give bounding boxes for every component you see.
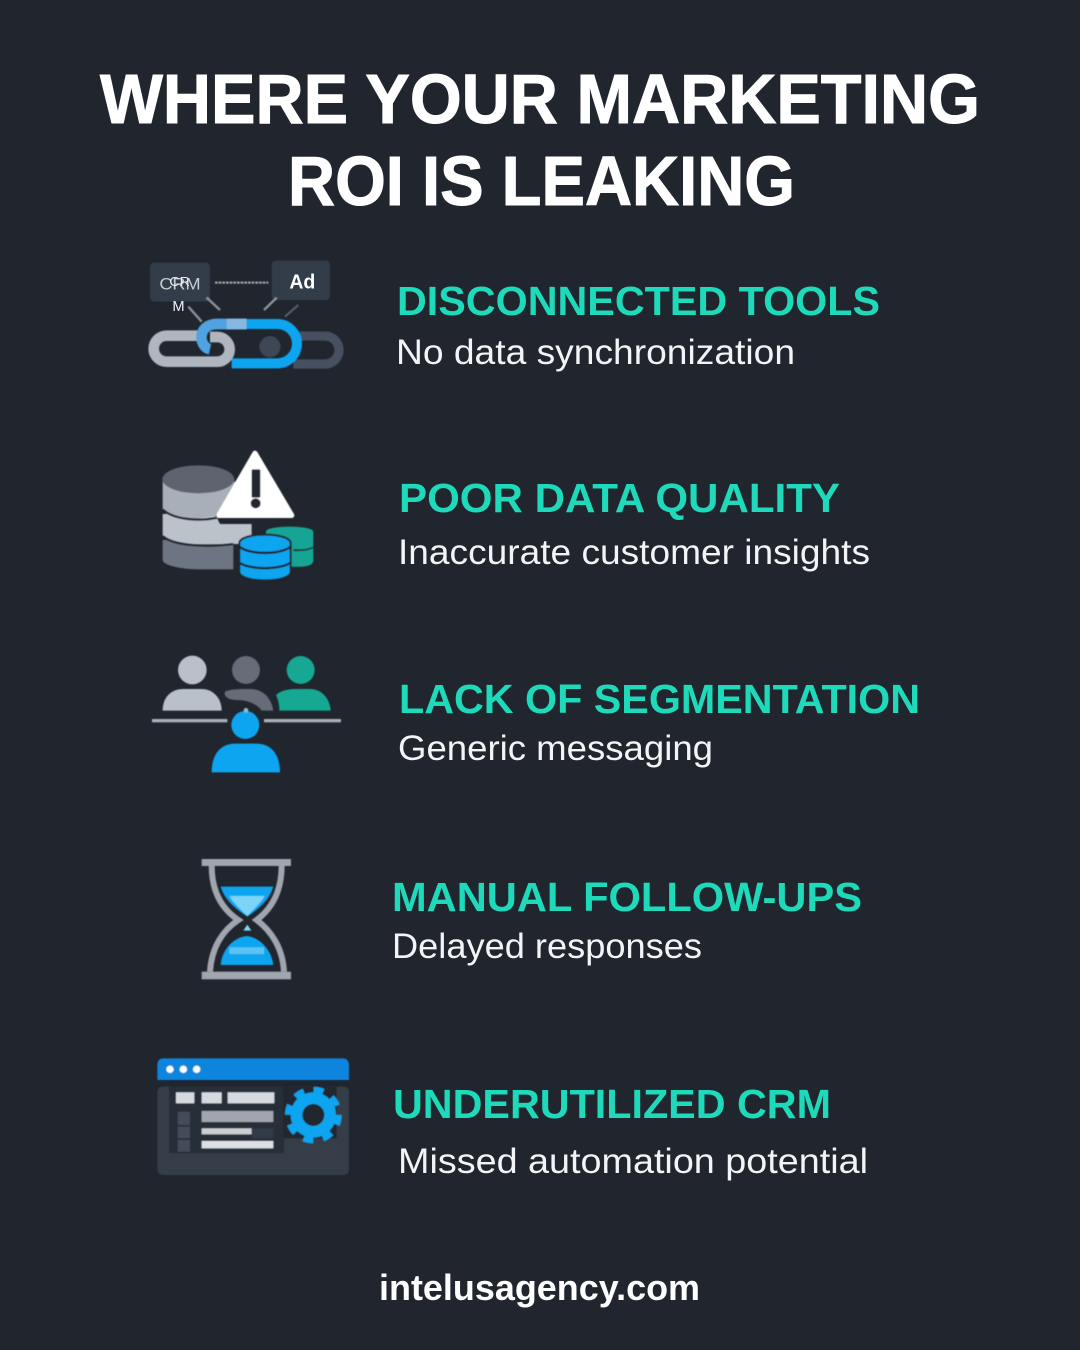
icon: audience people segments — [152, 656, 341, 772]
heading and text: disconnected tools: DISCONNECTED TOOLS — [397, 278, 880, 324]
icon: hourglass — [202, 859, 291, 979]
heading and text: manual follow-ups: MANUAL FOLLOW-UPS — [392, 874, 862, 920]
title — [100, 60, 980, 220]
footer website: intelusagency.com — [379, 1267, 700, 1308]
heading and text: underutilized crm: Missed automation potential — [398, 1142, 868, 1181]
heading and text: manual follow-ups: Delayed responses — [392, 927, 702, 966]
heading and text: manual follow-ups — [392, 874, 862, 966]
heading and text: disconnected tools: No data synchronization — [396, 333, 795, 372]
heading and text: lack of segmentation: Generic messaging — [398, 729, 713, 768]
title: ROI IS LEAKING — [288, 142, 795, 220]
heading and text: poor data quality — [398, 475, 870, 572]
heading and text: underutilized crm — [393, 1081, 868, 1181]
icon: CRM window with gear — [157, 1058, 349, 1175]
heading and text: disconnected tools — [396, 278, 880, 372]
icon: disconnected chain links with CRM and Ad boxes: CR — [169, 274, 190, 289]
heading and text: poor data quality: Inaccurate customer insights — [398, 533, 870, 572]
icon: disconnected chain links with CRM and Ad boxes: Ad — [289, 271, 315, 293]
icon: database with warning triangle — [162, 453, 313, 580]
icon: disconnected chain links with CRM and Ad boxes: M — [172, 299, 185, 315]
icon: disconnected chain links with CRM and Ad boxes — [150, 261, 339, 364]
icon: disconnected chain links with CRM and Ad boxes: CRM — [159, 274, 201, 293]
heading and text: poor data quality: POOR DATA QUALITY — [399, 475, 840, 521]
heading and text: underutilized crm: UNDERUTILIZED CRM — [393, 1081, 831, 1127]
title: WHERE YOUR MARKETING — [100, 60, 980, 138]
heading and text: lack of segmentation: LACK OF SEGMENTATION — [399, 676, 920, 722]
heading and text: lack of segmentation — [398, 676, 920, 768]
